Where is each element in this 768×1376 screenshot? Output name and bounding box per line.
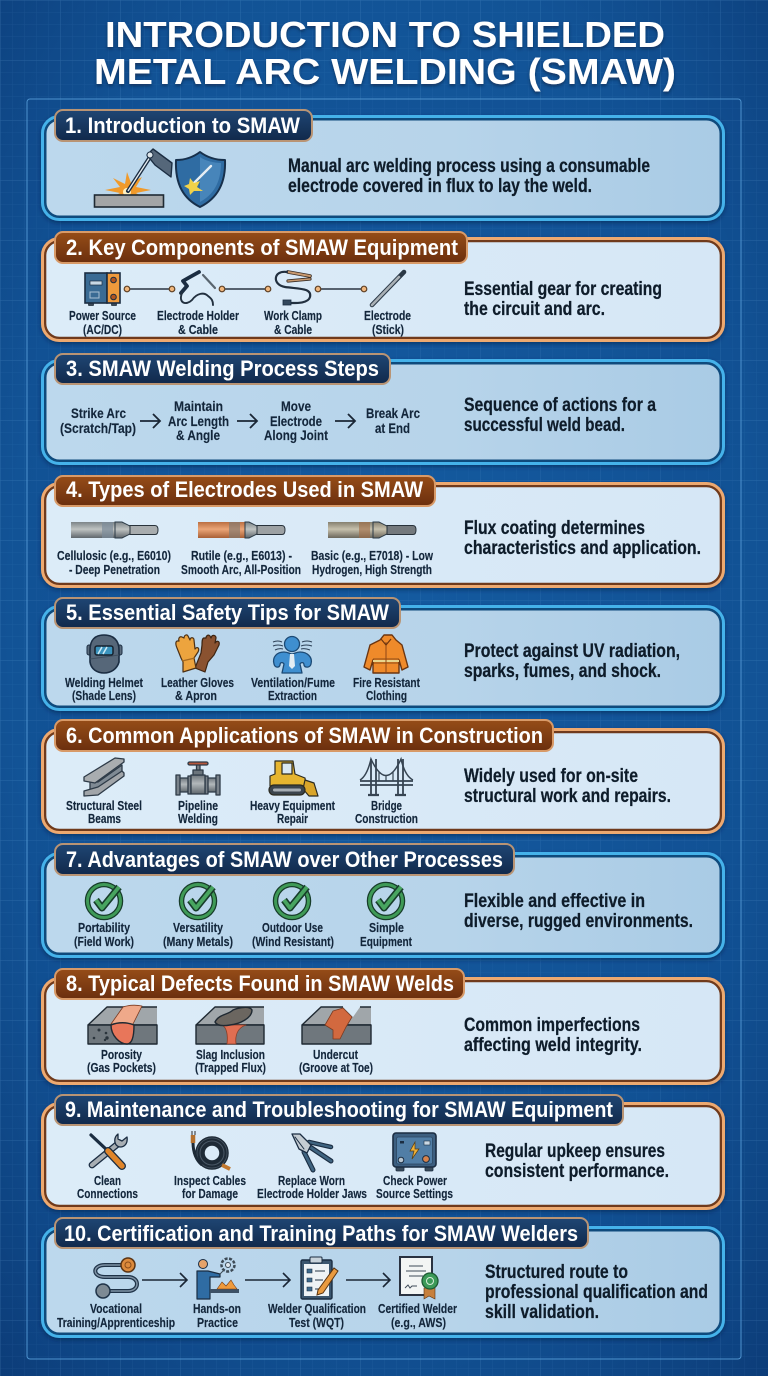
icon: ventilation and fume extraction xyxy=(273,636,312,673)
heading: section 5: 5. Essential Safety Tips for SMAW xyxy=(66,600,389,625)
panel: 9. Maintenance and Troubleshooting for SMAW Equipment xyxy=(42,1095,724,1208)
labels: section 9: for Damage xyxy=(182,1187,238,1201)
icon: leather gloves xyxy=(176,635,219,672)
title: INTRODUCTION TO SHIELDED xyxy=(105,14,665,55)
text: section 5 description xyxy=(464,641,680,682)
icon: rutile electrode xyxy=(198,522,285,538)
connector: source to holder xyxy=(124,286,175,292)
labels: section 4: Basic (e.g., E7018) - Low xyxy=(311,549,433,563)
labels: section 2: Electrode Holder xyxy=(157,309,239,323)
arrow: step 3 to 4 xyxy=(335,414,355,428)
labels: section 7: (Many Metals) xyxy=(163,935,233,949)
text: section 4 description: Flux coating determines xyxy=(464,518,645,539)
labels: section 8: Slag Inclusion xyxy=(196,1048,265,1062)
text: section 8 description: affecting weld integrity. xyxy=(464,1035,642,1056)
icon: power source xyxy=(85,270,120,306)
text: section 9 description: Regular upkeep ensures xyxy=(485,1141,665,1162)
labels: section 4: Hydrogen, High Strength xyxy=(312,563,432,577)
text: section 8 description xyxy=(464,1015,642,1056)
text: section 3 description: successful weld bead. xyxy=(464,415,625,436)
step: maintain arc length: Arc Length xyxy=(168,413,229,429)
labels: section 9: Inspect Cables xyxy=(174,1174,246,1188)
heading: section 7: 7. Advantages of SMAW over Other Processes xyxy=(66,847,503,872)
labels: section 5: Fire Resistant xyxy=(353,676,421,690)
icon: check outdoor use xyxy=(276,884,308,918)
labels: section 2: Work Clamp xyxy=(264,309,322,323)
panel: 3. SMAW Welding Process Steps xyxy=(42,354,724,464)
connector: holder to clamp xyxy=(219,286,271,292)
icon: hands-on practice xyxy=(197,1258,239,1299)
step: break arc xyxy=(366,405,420,436)
heading: section 10: 10. Certification and Training Paths for SMAW Welders xyxy=(64,1221,578,1246)
labels: section 10: Vocational xyxy=(90,1302,142,1316)
icon: power source settings xyxy=(393,1133,436,1171)
labels: section 9: Clean xyxy=(94,1174,121,1188)
labels: section 5: Ventilation/Fume xyxy=(251,676,335,690)
icon: electrode holder xyxy=(181,272,215,305)
text: section 7 description xyxy=(464,891,693,932)
icon: electrode holder jaws xyxy=(292,1134,331,1170)
connector: clamp to electrode xyxy=(315,286,367,292)
labels: section 2: (AC/DC) xyxy=(83,323,122,337)
icon: coiled cable xyxy=(192,1131,230,1169)
labels: section 6: Structural Steel xyxy=(66,799,142,813)
labels: section 5: Extraction xyxy=(268,689,317,703)
labels: section 6: Repair xyxy=(277,812,308,826)
arrow: training to practice xyxy=(142,1273,187,1287)
labels: section 6: Construction xyxy=(355,812,418,826)
heading: section 6: 6. Common Applications of SMAW in Construction xyxy=(66,723,543,748)
step: maintain arc length: & Angle xyxy=(176,427,220,443)
heading: section 9: 9. Maintenance and Troubleshooting for SMAW Equipment xyxy=(65,1097,614,1122)
text: section 7 description: Flexible and effective in xyxy=(464,891,645,912)
labels: section 10: (e.g., AWS) xyxy=(391,1316,446,1330)
labels: section 6: Beams xyxy=(88,812,121,826)
text: section 1 description xyxy=(288,156,650,197)
icon: welding torch and spark xyxy=(94,149,172,207)
text: section 1 description: Manual arc welding process using a consumable xyxy=(288,156,650,177)
labels: section 2: & Cable xyxy=(274,323,312,337)
icon: fire resistant jacket xyxy=(364,635,408,673)
heading: section 4: 4. Types of Electrodes Used in SMAW xyxy=(66,477,423,502)
labels: section 5: Clothing xyxy=(366,689,407,703)
heading: section 3: 3. SMAW Welding Process Steps xyxy=(66,356,379,381)
icon: shield xyxy=(176,152,225,207)
labels: section 10 xyxy=(57,1302,457,1330)
icon: qualification clipboard xyxy=(301,1257,338,1299)
labels: section 10: Welder Qualification xyxy=(268,1302,366,1316)
panel: 2. Key Components of SMAW Equipment xyxy=(42,232,724,340)
labels: section 5: Welding Helmet xyxy=(65,676,144,690)
labels: section 4: - Deep Penetration xyxy=(69,563,160,577)
labels: section 5 xyxy=(65,676,421,703)
arrow: test to certification xyxy=(346,1273,390,1287)
labels: section 4: Cellulosic (e.g., E6010) xyxy=(57,549,171,563)
text: section 2 description xyxy=(464,279,662,320)
step: maintain arc length xyxy=(168,398,229,443)
step: move electrode: Move xyxy=(281,398,311,414)
text: section 9 description xyxy=(485,1141,669,1182)
text: section 1 description: electrode covered in flux to lay the weld. xyxy=(288,176,592,197)
panel: 8. Typical Defects Found in SMAW Welds xyxy=(42,969,724,1084)
icon: undercut defect xyxy=(302,1007,371,1044)
icon: welder certificate xyxy=(400,1257,438,1299)
labels: section 4 xyxy=(57,549,433,577)
text: section 10 description: skill validation. xyxy=(485,1302,599,1323)
labels: section 10: Certified Welder xyxy=(378,1302,457,1316)
labels: section 7: Portability xyxy=(78,921,130,935)
text: section 10 description: professional qualification and xyxy=(485,1282,708,1303)
labels: section 2: Power Source xyxy=(69,309,136,323)
arrow: step 2 to 3 xyxy=(237,414,257,428)
step: maintain arc length: Maintain xyxy=(174,398,223,414)
labels: section 8: (Trapped Flux) xyxy=(195,1061,266,1075)
icon: electrode stick xyxy=(372,272,404,305)
panel: 10. Certification and Training Paths for SMAW Welders xyxy=(42,1218,724,1336)
text: section 9 description: consistent performance. xyxy=(485,1161,669,1182)
labels: section 9: Source Settings xyxy=(376,1187,453,1201)
step: move electrode xyxy=(264,398,328,443)
labels: section 7: Outdoor Use xyxy=(262,921,323,935)
text: section 6 description xyxy=(464,766,671,807)
labels: section 7: Versatility xyxy=(173,921,223,935)
labels: section 8: Porosity xyxy=(101,1048,142,1062)
labels: section 7: (Field Work) xyxy=(74,935,134,949)
text: section 6 description: structural work and repairs. xyxy=(464,786,671,807)
icon: pipeline valve xyxy=(176,762,220,795)
text: section 10 description: Structured route to xyxy=(485,1262,628,1283)
text: section 8 description: Common imperfections xyxy=(464,1015,640,1036)
labels: section 8 xyxy=(87,1048,373,1075)
icon: slag inclusion defect xyxy=(196,1007,264,1044)
icon: work clamp xyxy=(276,272,310,305)
labels: section 4: Rutile (e.g., E6013) - xyxy=(191,549,292,563)
icon: wrench and screwdriver xyxy=(91,1134,127,1166)
icon: training path xyxy=(95,1258,137,1298)
labels: section 8: (Gas Pockets) xyxy=(87,1061,156,1075)
labels: section 9 xyxy=(77,1174,453,1201)
heading: section 2: 2. Key Components of SMAW Equipment xyxy=(66,235,459,260)
labels: section 8: Undercut xyxy=(313,1048,359,1062)
labels: section 8: (Groove at Toe) xyxy=(299,1061,373,1075)
text: section 10 description xyxy=(485,1262,708,1323)
heading: section 8: 8. Typical Defects Found in SMAW Welds xyxy=(66,971,454,996)
text: section 3 description xyxy=(464,395,656,436)
icon: cellulosic electrode xyxy=(71,522,158,538)
text: section 5 description: sparks, fumes, and shock. xyxy=(464,661,661,682)
step: strike arc: (Scratch/Tap) xyxy=(60,420,136,436)
panel: 4. Types of Electrodes Used in SMAW xyxy=(42,476,724,586)
icon: suspension bridge xyxy=(360,759,413,795)
panel: 5. Essential Safety Tips for SMAW xyxy=(42,598,724,710)
icon: check simple equipment xyxy=(370,884,402,918)
arrow: step 1 to 2 xyxy=(140,414,160,428)
panel: 6. Common Applications of SMAW in Construction xyxy=(42,720,724,832)
heading: section 1: 1. Introduction to SMAW xyxy=(65,113,300,138)
icon: welding helmet xyxy=(87,635,122,673)
text: section 7 description: diverse, rugged environments. xyxy=(464,911,693,932)
labels: section 10: Training/Apprenticeship xyxy=(57,1316,175,1330)
labels: section 10: Hands-on xyxy=(193,1302,241,1316)
labels: section 6: Bridge xyxy=(371,799,402,813)
labels: section 4: Smooth Arc, All-Position xyxy=(181,563,301,577)
text: section 5 description: Protect against UV radiation, xyxy=(464,641,680,662)
text: section 4 description xyxy=(464,518,701,559)
text: section 6 description: Widely used for on-site xyxy=(464,766,638,787)
labels: section 10: Practice xyxy=(197,1316,238,1330)
title: METAL ARC WELDING (SMAW) xyxy=(94,51,676,92)
step: move electrode: Along Joint xyxy=(264,427,328,443)
icon: check versatility xyxy=(182,884,214,918)
labels: section 6: Heavy Equipment xyxy=(250,799,336,813)
labels: section 6 xyxy=(66,799,418,826)
labels: section 5: Leather Gloves xyxy=(161,676,234,690)
step: break arc: at End xyxy=(375,420,410,436)
text: section 2 description: Essential gear for creating xyxy=(464,279,662,300)
labels: section 7: Equipment xyxy=(360,935,413,949)
labels: section 5: (Shade Lens) xyxy=(72,689,136,703)
labels: section 5: & Apron xyxy=(175,689,217,703)
step: break arc: Break Arc xyxy=(366,405,420,421)
step: strike arc xyxy=(60,405,136,436)
labels: section 7: (Wind Resistant) xyxy=(252,935,334,949)
icon: basic electrode xyxy=(328,522,416,538)
labels: section 9: Connections xyxy=(77,1187,138,1201)
labels: section 7: Simple xyxy=(369,921,404,935)
labels: section 9: Check Power xyxy=(383,1174,447,1188)
panel: 1. Introduction to SMAW xyxy=(42,110,724,220)
icon: porosity defect xyxy=(88,1005,157,1044)
labels: section 2 xyxy=(69,309,411,337)
labels: section 9: Replace Worn xyxy=(278,1174,345,1188)
text: section 3 description: Sequence of actions for a xyxy=(464,395,656,416)
panel: 7. Advantages of SMAW over Other Processes xyxy=(42,844,724,956)
step: move electrode: Electrode xyxy=(270,413,322,429)
labels: section 6: Pipeline xyxy=(178,799,218,813)
labels: section 2: (Stick) xyxy=(372,323,404,337)
labels: section 2: Electrode xyxy=(364,309,411,323)
icon: check portability xyxy=(88,884,120,918)
labels: section 2: & Cable xyxy=(178,323,218,337)
arrow: practice to test xyxy=(245,1273,290,1287)
icon: bulldozer xyxy=(269,761,318,796)
title xyxy=(94,14,676,92)
labels: section 7 xyxy=(74,921,413,949)
icon: steel beam xyxy=(84,758,124,796)
text: section 2 description: the circuit and arc. xyxy=(464,299,605,320)
labels: section 10: Test (WQT) xyxy=(289,1316,344,1330)
text: section 4 description: characteristics and application. xyxy=(464,538,701,559)
labels: section 9: Electrode Holder Jaws xyxy=(257,1187,367,1201)
step: strike arc: Strike Arc xyxy=(71,405,126,421)
labels: section 6: Welding xyxy=(178,812,218,826)
